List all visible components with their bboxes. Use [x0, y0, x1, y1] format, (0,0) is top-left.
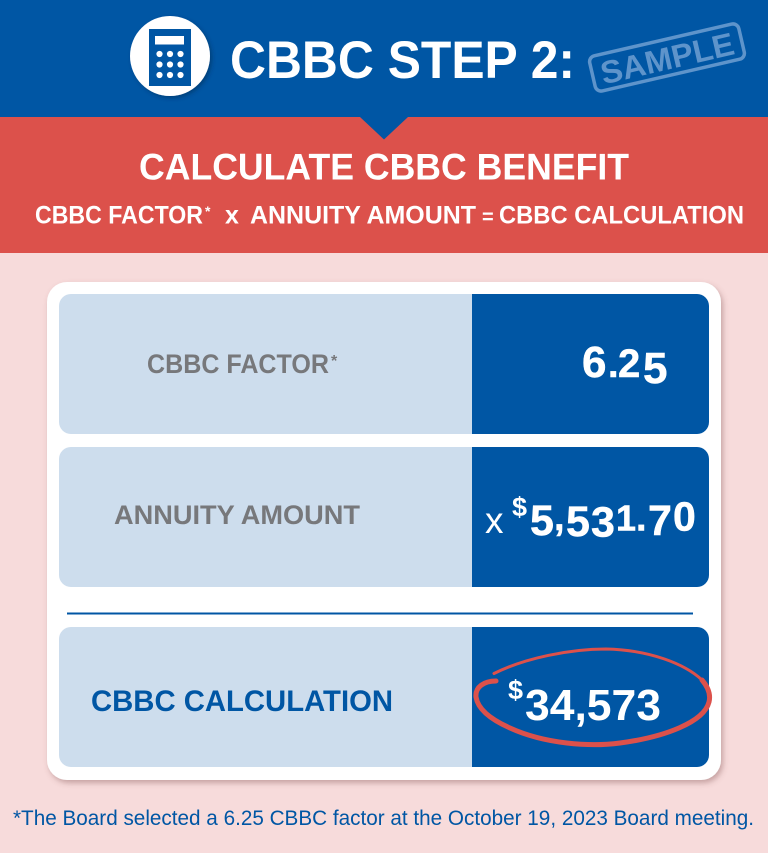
row: CBBC factor: CBBC FACTOR [147, 349, 329, 379]
formula: x [225, 202, 239, 230]
footnote: *The Board selected a 6.25 CBBC factor at the October 19, 2023 Board meeting. [13, 806, 754, 830]
header band [0, 0, 768, 117]
row: annuity amount: 0 [673, 494, 696, 540]
row: CBBC calculation: 34,573 [525, 681, 661, 730]
row: annuity amount: $ [512, 492, 527, 522]
divider [67, 612, 693, 614]
row: annuity amount: 1 [616, 498, 636, 538]
subheader band [0, 117, 768, 253]
row: CBBC factor: * [331, 353, 338, 370]
row: annuity amount: 5 [566, 498, 590, 546]
row: CBBC factor [59, 294, 709, 434]
row: annuity amount [59, 447, 709, 587]
arrow [360, 117, 408, 140]
row: annuity amount: 5 [530, 497, 554, 545]
formula: CBBC CALCULATION [499, 202, 744, 230]
row: annuity amount: , [554, 497, 565, 539]
row: CBBC factor: 2 [618, 342, 640, 386]
row: CBBC calculation [59, 627, 710, 767]
title: CBBC STEP 2: [230, 31, 575, 90]
callout: red circle [476, 649, 710, 745]
row: annuity amount: 7 [648, 497, 672, 545]
row: CBBC calculation: $ [508, 675, 523, 705]
formula: CBBC FACTOR [35, 202, 203, 230]
subheading: CALCULATE CBBC BENEFIT [139, 146, 629, 188]
formula: = [482, 206, 494, 228]
row: CBBC factor: . [608, 344, 619, 386]
row: annuity amount: ANNUITY AMOUNT [114, 500, 361, 530]
row: CBBC calculation: CBBC CALCULATION [91, 685, 393, 718]
row: annuity amount: . [636, 498, 647, 540]
icon: calculator [130, 16, 210, 96]
panel: calculation card [47, 282, 721, 780]
row: CBBC factor: 5 [643, 344, 667, 393]
row: CBBC factor: 6 [582, 338, 606, 387]
row: annuity amount: 3 [591, 498, 615, 546]
formula: * [205, 203, 211, 219]
formula: ANNUITY AMOUNT [250, 202, 476, 230]
row: annuity amount: x [485, 500, 504, 541]
stamp: sample: SAMPLE [597, 26, 738, 91]
